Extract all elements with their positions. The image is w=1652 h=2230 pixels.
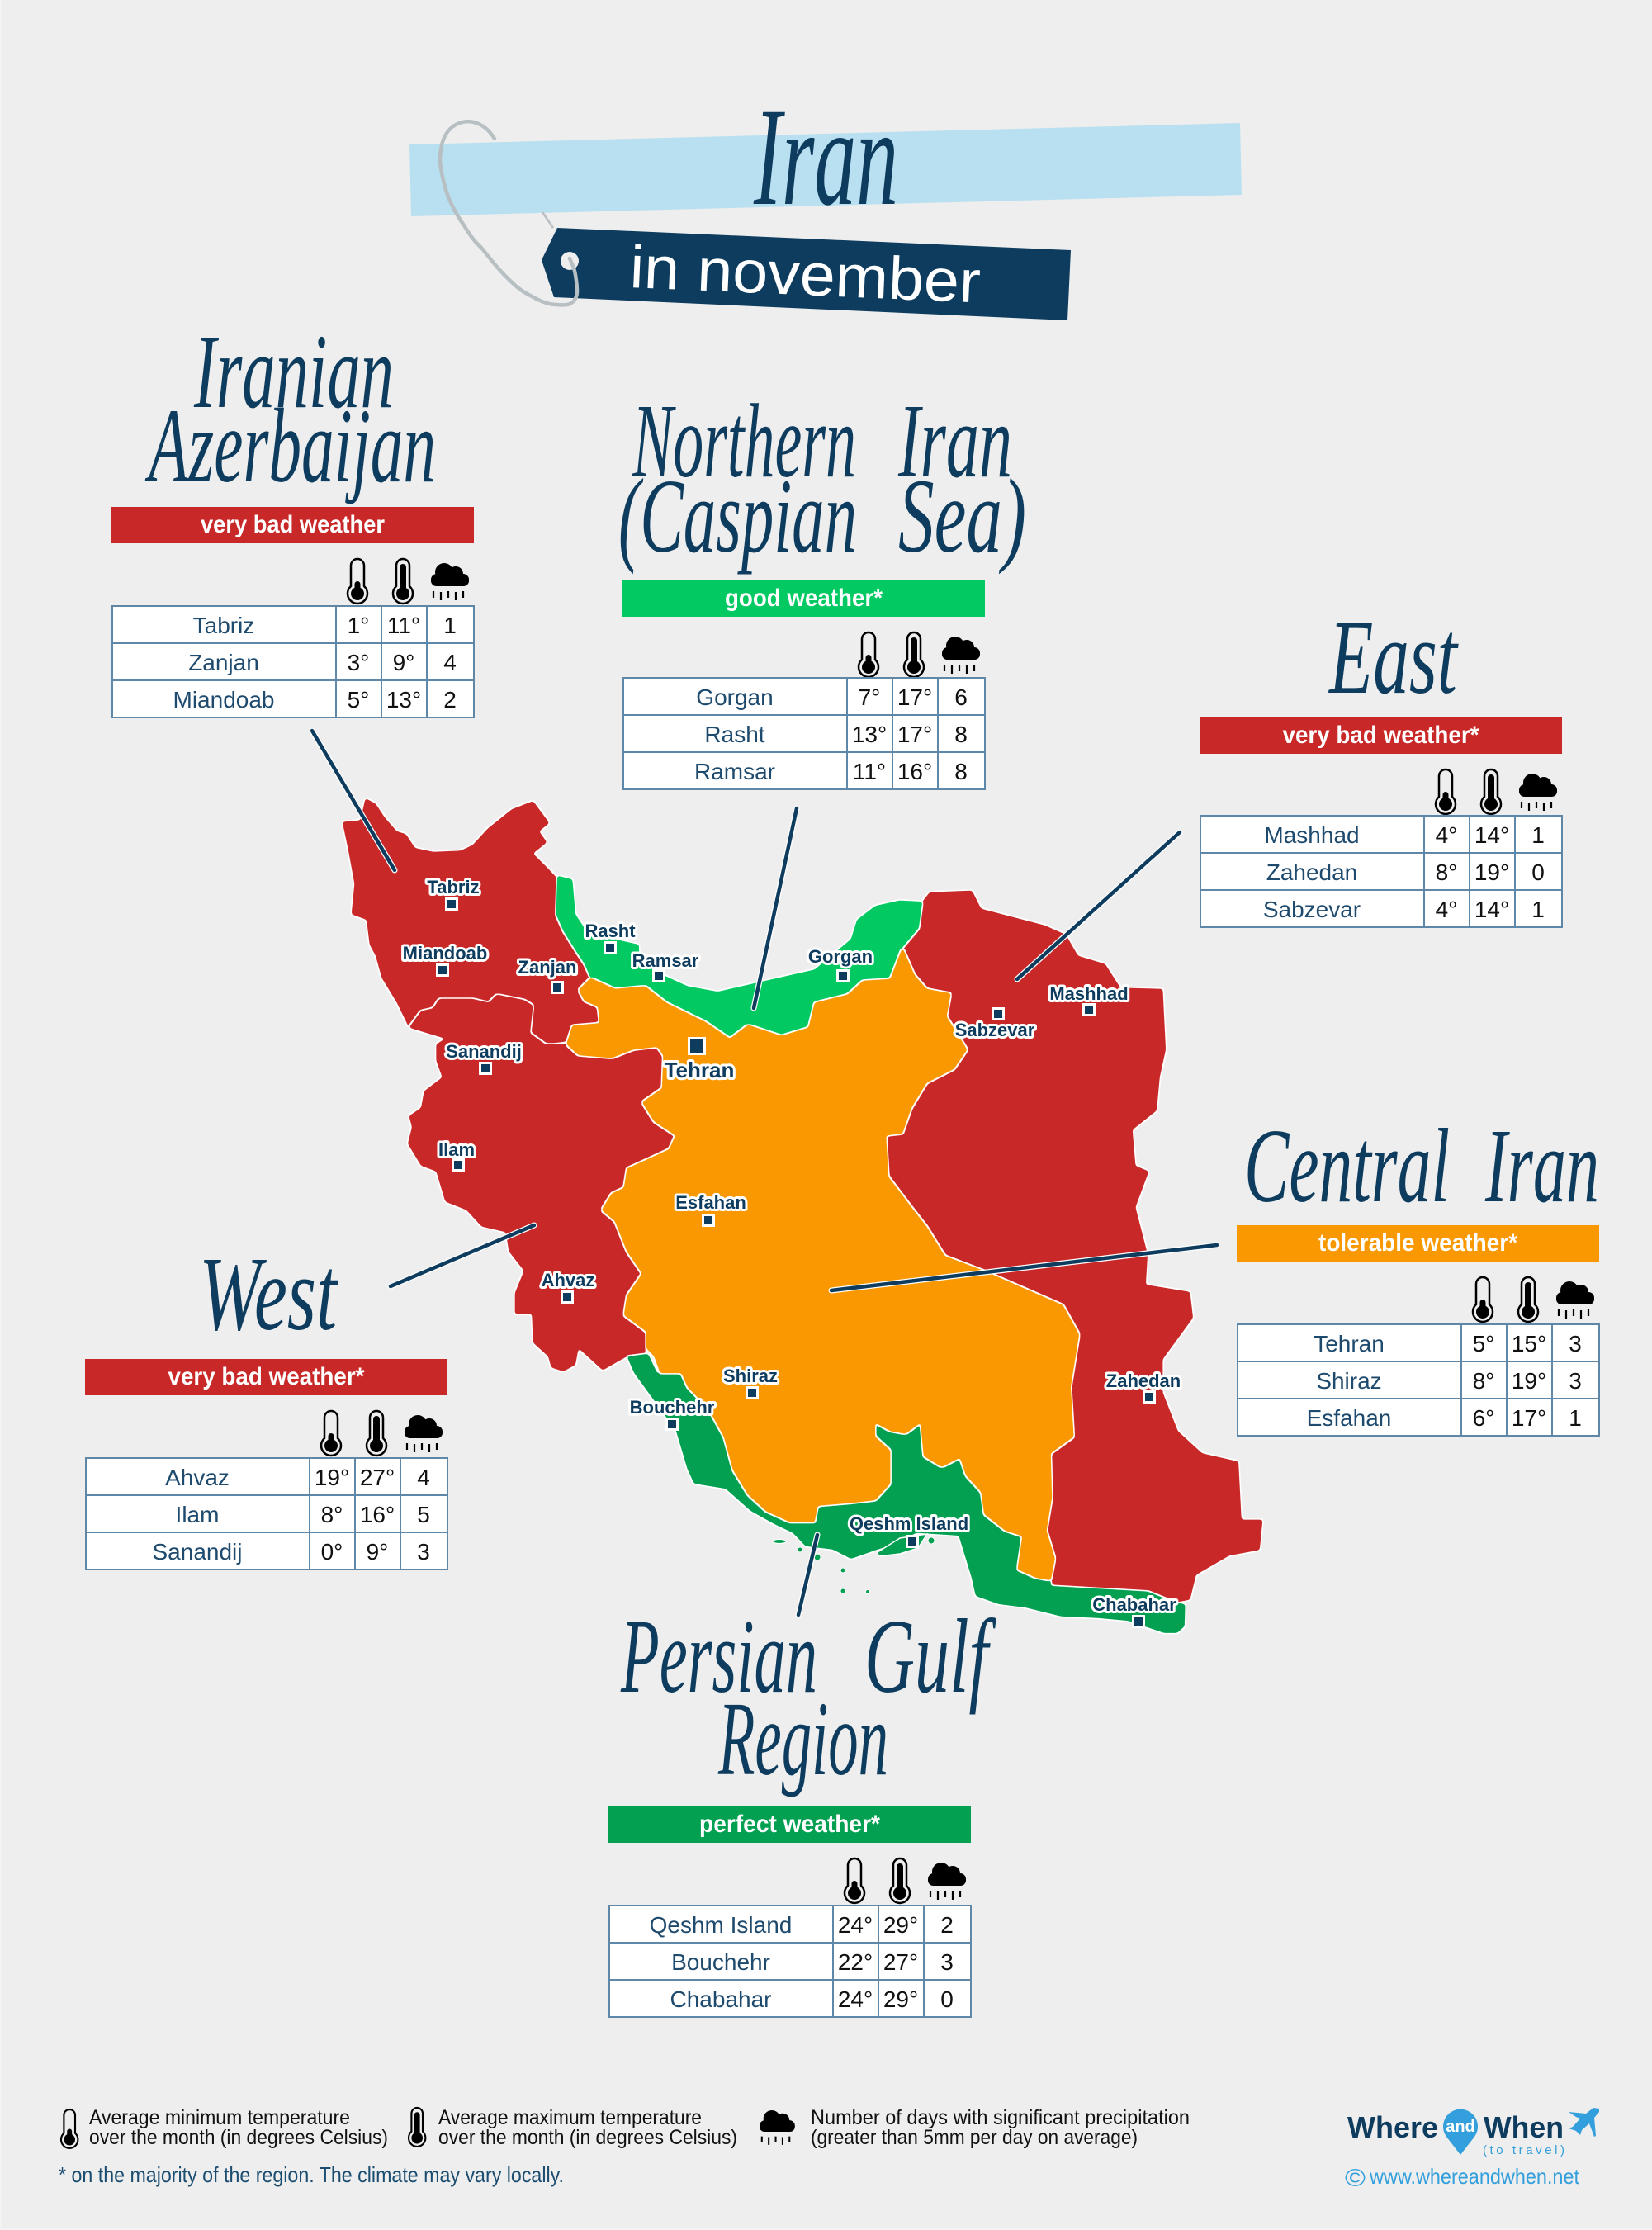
climate table: 13° xyxy=(852,722,887,747)
climate table: Zanjan xyxy=(188,650,259,675)
climate table: 11° xyxy=(387,613,420,638)
heading: (Caspian xyxy=(618,458,857,575)
weather banner: very bad weather* xyxy=(168,1363,365,1390)
title ribbon xyxy=(409,123,1242,216)
climate table: 3 xyxy=(1569,1331,1582,1356)
leader lines xyxy=(312,731,1217,1615)
title: Iran in november xyxy=(409,80,1242,320)
table icons xyxy=(1473,1277,1594,1322)
city: Sabzevar: Sabzevar xyxy=(955,1020,1035,1040)
city: Tabriz: Tabriz xyxy=(427,877,480,897)
climate table: 5 xyxy=(417,1502,430,1527)
panel: Northern Iran xyxy=(618,383,1026,789)
climate table: Sanandij xyxy=(153,1539,242,1565)
city: Chabahar: Chabahar xyxy=(1092,1594,1176,1615)
city: Ahvaz xyxy=(542,1270,594,1301)
climate table: 16° xyxy=(897,759,932,784)
climate table: Sabzevar xyxy=(1263,897,1361,922)
climate table xyxy=(1200,816,1562,927)
climate table: 6 xyxy=(954,684,968,710)
city: Zahedan: Zahedan xyxy=(1106,1371,1181,1391)
heading: Gulf xyxy=(864,1598,996,1716)
climate table: Ramsar xyxy=(694,759,775,784)
climate table: 4 xyxy=(443,650,457,675)
climate table: 3 xyxy=(940,1949,954,1975)
weather banner: very bad weather xyxy=(201,511,385,538)
legend xyxy=(59,2106,1190,2187)
subheading: in november: in november xyxy=(628,234,982,316)
climate table: 19° xyxy=(1512,1368,1546,1394)
climate table: 1 xyxy=(1531,822,1545,848)
climate table: 19° xyxy=(1474,859,1509,885)
city: Esfahan xyxy=(675,1192,746,1224)
panel: East xyxy=(1200,599,1562,927)
climate table: 24° xyxy=(838,1986,873,2012)
climate table: 1 xyxy=(443,613,457,638)
weather banner xyxy=(1200,717,1562,754)
climate table: 29° xyxy=(883,1986,918,2012)
region: West xyxy=(408,994,675,1371)
city: Shiraz xyxy=(723,1366,778,1397)
climate table: Ahvaz xyxy=(165,1465,230,1490)
climate table: 8 xyxy=(954,759,968,784)
leader: West xyxy=(391,1225,534,1286)
leader: East xyxy=(1017,832,1180,979)
climate table: 4° xyxy=(1436,897,1457,922)
city: Esfahan: Esfahan xyxy=(675,1192,746,1213)
climate table: 24° xyxy=(838,1912,873,1938)
legend: maximum temperature: Average maximum temperature xyxy=(438,2106,702,2129)
city: Ramsar xyxy=(632,950,699,980)
climate table: 8° xyxy=(1473,1368,1494,1394)
city: Sanandij xyxy=(446,1041,522,1072)
climate table: 6° xyxy=(1473,1405,1494,1431)
climate table: Tehran xyxy=(1314,1331,1385,1356)
climate table: Bouchehr xyxy=(671,1949,770,1975)
tag hole xyxy=(561,252,579,270)
heading: Central xyxy=(1244,1108,1450,1225)
table icons xyxy=(348,559,469,604)
climate table xyxy=(86,1458,447,1570)
climate table: 1 xyxy=(1531,897,1545,922)
climate table: 1 xyxy=(1569,1405,1582,1431)
city: Tehran: Tehran xyxy=(665,1058,734,1082)
climate table: 16° xyxy=(360,1502,395,1527)
climate table: 17° xyxy=(897,722,932,747)
city: Ramsar: Ramsar xyxy=(632,950,699,971)
tag string end xyxy=(542,212,553,228)
weather banner xyxy=(111,507,474,543)
heading: Iran xyxy=(897,383,1012,500)
weather banner xyxy=(608,1806,971,1843)
climate table: Gorgan xyxy=(696,684,774,710)
heading xyxy=(145,314,436,505)
city: Qeshm Island xyxy=(850,1513,968,1546)
logo: Where and When: Where xyxy=(1347,2110,1438,2144)
icon: plane xyxy=(1569,2108,1599,2137)
city: Rasht: Rasht xyxy=(585,921,636,941)
weather banner: very bad weather* xyxy=(1283,722,1479,749)
climate table xyxy=(1238,1324,1599,1436)
climate table: 9° xyxy=(393,650,414,675)
legend: minimum temperature: over the month (in degrees Celsius) xyxy=(89,2126,388,2149)
city: Zanjan: Zanjan xyxy=(518,957,576,978)
heading: Sea) xyxy=(898,458,1026,575)
city: Miandoab: Miandoab xyxy=(403,943,487,963)
heading xyxy=(1244,1108,1599,1225)
climate table: 2 xyxy=(443,687,457,713)
climate table: Chabahar xyxy=(670,1986,771,2012)
logo: Where and When xyxy=(1345,2108,1599,2192)
climate table: 17° xyxy=(897,684,932,710)
climate table: 14° xyxy=(1474,897,1509,922)
logo: Where and When: © xyxy=(1345,2165,1366,2192)
table icons xyxy=(1436,769,1557,814)
logo: Where and When: www.whereandwhen.net xyxy=(1369,2164,1580,2189)
table icons xyxy=(845,1858,966,1903)
region: Northern Iran xyxy=(556,875,922,1039)
climate table: Esfahan xyxy=(1307,1405,1391,1431)
heading xyxy=(620,1598,996,1798)
weather banner: good weather* xyxy=(725,585,883,612)
city: Rasht xyxy=(585,921,636,952)
map of Iran xyxy=(343,798,1262,1633)
climate table xyxy=(609,1906,971,2017)
climate table: 19° xyxy=(315,1465,349,1490)
city: Miandoab xyxy=(403,943,487,974)
city: Zanjan xyxy=(518,957,576,992)
heading: Northern xyxy=(632,383,856,500)
climate table: Tabriz xyxy=(193,613,254,638)
city: Tabriz xyxy=(427,877,480,908)
city: Gorgan xyxy=(808,946,873,980)
climate table: 0 xyxy=(940,1986,954,2012)
climate table: 8 xyxy=(954,722,968,747)
logo: Where and When: When xyxy=(1484,2110,1564,2144)
city: Sanandij: Sanandij xyxy=(446,1041,522,1062)
table icons xyxy=(859,632,980,677)
climate table: 9° xyxy=(367,1539,388,1565)
weather banner: perfect weather* xyxy=(699,1811,880,1838)
city: Ahvaz: Ahvaz xyxy=(542,1270,594,1290)
city: Sabzevar xyxy=(955,1010,1035,1040)
climate table: Mashhad xyxy=(1264,822,1360,848)
city: Gorgan: Gorgan xyxy=(808,946,873,967)
city: Qeshm Island: Qeshm Island xyxy=(850,1513,968,1534)
region: Central Iran xyxy=(566,948,1079,1580)
tag ring xyxy=(440,121,577,305)
heading: Iran xyxy=(1484,1108,1599,1225)
climate table: 8° xyxy=(1436,859,1457,885)
climate table: 14° xyxy=(1474,822,1509,848)
heading: Iranian xyxy=(193,314,394,431)
climate table: 29° xyxy=(883,1912,918,1938)
climate table: Qeshm Island xyxy=(650,1912,792,1938)
logo: Where and When: (to travel) xyxy=(1483,2143,1564,2157)
logo: Where and When: and xyxy=(1446,2118,1475,2136)
leader: Central Iran xyxy=(831,1245,1217,1290)
panel: West xyxy=(85,1236,447,1570)
city: Zahedan xyxy=(1106,1371,1181,1401)
city: Bouchehr: Bouchehr xyxy=(630,1397,715,1418)
climate table: 3° xyxy=(348,650,369,675)
legend: maximum temperature xyxy=(409,2106,737,2149)
climate table: 27° xyxy=(360,1465,395,1490)
climate table: 7° xyxy=(859,684,880,710)
weather banner xyxy=(1237,1225,1599,1262)
city: Shiraz: Shiraz xyxy=(723,1366,778,1386)
weather banner xyxy=(85,1359,447,1395)
climate table: Miandoab xyxy=(173,687,274,713)
climate table: 8° xyxy=(321,1502,343,1527)
climate table: 13° xyxy=(386,687,421,713)
climate table: 1° xyxy=(348,613,369,638)
city: Mashhad xyxy=(1049,983,1129,1014)
region: East xyxy=(886,891,1262,1603)
legend: minimum temperature xyxy=(61,2106,388,2149)
legend: minimum temperature: Average minimum temperature xyxy=(89,2106,350,2129)
tag xyxy=(542,228,1071,320)
legend: precipitation: Number of days with significant precipitation xyxy=(811,2106,1190,2129)
climate table xyxy=(112,606,474,717)
footnote: * on the majority of the region. The climate may vary locally. xyxy=(59,2162,564,2187)
climate table: Ilam xyxy=(176,1502,219,1527)
city: Bouchehr xyxy=(630,1397,715,1428)
climate table: 2 xyxy=(940,1912,954,1938)
heading xyxy=(618,383,1026,575)
climate table: Rasht xyxy=(704,722,765,747)
icon: map pin xyxy=(1443,2109,1478,2155)
climate table: 0° xyxy=(321,1539,343,1565)
legend: precipitation xyxy=(760,2106,1190,2149)
climate table: 4° xyxy=(1436,822,1457,848)
panel: Central Iran xyxy=(1237,1108,1599,1436)
heading: West xyxy=(199,1236,338,1353)
city: Ilam xyxy=(438,1139,475,1169)
city: Tehran xyxy=(665,1039,734,1082)
climate table: 0 xyxy=(1531,859,1545,885)
climate table: 5° xyxy=(1473,1331,1494,1356)
climate table: 3 xyxy=(417,1539,430,1565)
Qeshm island xyxy=(878,1534,927,1556)
region: Iranian Azerbaijan xyxy=(343,798,599,1044)
weather banner: tolerable weather* xyxy=(1318,1229,1517,1257)
climate table: 17° xyxy=(1512,1405,1546,1431)
heading: Region xyxy=(717,1681,888,1798)
panel: Persian Gulf Region xyxy=(608,1598,996,2017)
climate table: 3 xyxy=(1569,1368,1582,1394)
table icons xyxy=(321,1411,443,1456)
climate table: Zahedan xyxy=(1266,859,1357,885)
city: Mashhad: Mashhad xyxy=(1049,983,1129,1004)
legend: precipitation: (greater than 5mm per day on average) xyxy=(811,2126,1138,2149)
city: Ilam: Ilam xyxy=(438,1139,475,1160)
leader: Iranian Azerbaijan xyxy=(312,731,395,870)
map city labels xyxy=(403,877,1181,1626)
climate table: 15° xyxy=(1512,1331,1546,1356)
heading: Iran: Iran xyxy=(753,80,898,235)
weather banner xyxy=(622,580,985,617)
climate table: 5° xyxy=(348,687,369,713)
small islands xyxy=(773,1537,935,1593)
climate table: 27° xyxy=(883,1949,918,1975)
heading: East xyxy=(1328,599,1459,717)
climate table: 22° xyxy=(838,1949,873,1975)
climate table: Shiraz xyxy=(1316,1368,1382,1394)
climate table xyxy=(623,678,985,789)
panel: Iranian Azerbaijan xyxy=(111,314,474,717)
heading: Persian xyxy=(620,1598,817,1716)
city: Chabahar xyxy=(1092,1594,1176,1626)
leader: Persian Gulf xyxy=(798,1535,817,1615)
climate table: 4 xyxy=(417,1465,430,1490)
legend: maximum temperature: over the month (in degrees Celsius) xyxy=(438,2126,737,2149)
region: Persian Gulf xyxy=(627,1354,1186,1633)
climate table: 11° xyxy=(853,759,886,784)
leader: Northern Iran xyxy=(754,808,797,1008)
heading: Azerbaijan xyxy=(145,388,436,505)
